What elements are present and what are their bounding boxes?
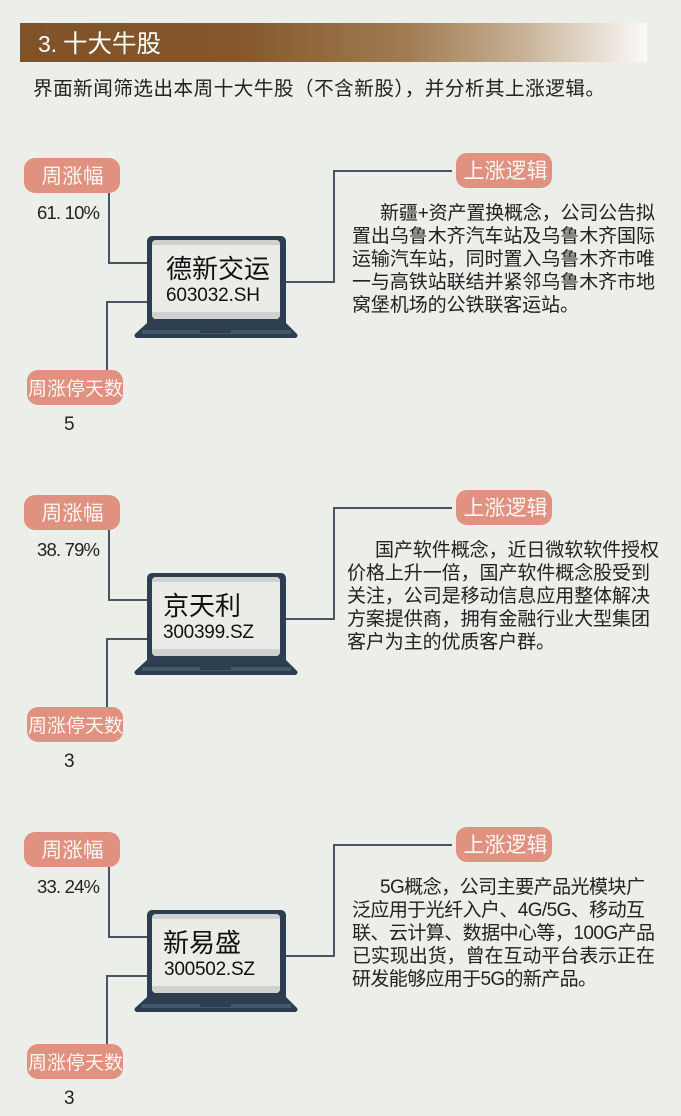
connector lines [107, 508, 452, 707]
badge: limit-up days: 周涨停天数 [28, 715, 123, 737]
rally logic text: 联、云计算、数据中心等，100G产品 [352, 922, 655, 944]
intro text: 界面新闻筛选出本周十大牛股（不含新股），并分析其上涨逻辑。 [33, 78, 605, 100]
title bar [20, 23, 647, 62]
weekly gain value: 38. 79% [37, 539, 100, 560]
limit-up days value: 3 [64, 1088, 75, 1109]
rally logic text: 一与高铁站联结并紧邻乌鲁木齐市地 [352, 271, 655, 293]
icon: laptop [134, 910, 298, 1012]
limit-up days value: 3 [64, 751, 75, 772]
rally logic text: 窝堡机场的公铁联客运站。 [352, 294, 579, 316]
stock code: 300502.SZ [164, 959, 255, 980]
icon: laptop [135, 236, 298, 338]
stock name: 德新交运 [166, 254, 270, 284]
panel: stock 2 京天利 [24, 490, 659, 772]
stock name: 新易盛 [163, 928, 241, 958]
badge: rally logic [456, 153, 552, 188]
stock code: 300399.SZ [163, 622, 254, 643]
weekly gain value: 61. 10% [37, 202, 100, 223]
rally logic text [352, 875, 655, 990]
rally logic text: 国产软件概念，近日微软软件授权 [375, 538, 659, 561]
connector lines [107, 171, 452, 370]
rally logic text: 置出乌鲁木齐汽车站及乌鲁木齐国际 [352, 225, 655, 247]
badge: weekly gain: 周涨幅 [42, 165, 104, 188]
limit-up days value: 5 [64, 414, 75, 435]
stock code: 603032.SH [166, 285, 260, 306]
connector lines [107, 845, 452, 1044]
rally logic text: 5G概念，公司主要产品光模块广 [380, 875, 645, 898]
title bar: 十大牛股 [63, 30, 161, 58]
rally logic text: 泛应用于光纤入户、4G/5G、移动互 [352, 899, 645, 921]
badge: weekly gain: 周涨幅 [42, 839, 104, 862]
rally logic text: 运输汽车站，同时置入乌鲁木齐市唯 [352, 248, 655, 270]
badge: weekly gain: 周涨幅 [42, 502, 104, 525]
rally logic text: 客户为主的优质客户群。 [347, 631, 555, 653]
badge: weekly gain [24, 832, 120, 867]
rally logic text: 价格上升一倍，国产软件概念股受到 [347, 561, 650, 584]
badge: limit-up days: 周涨停天数 [28, 1052, 123, 1074]
weekly gain value: 33. 24% [37, 876, 100, 897]
badge: rally logic: 上涨逻辑 [464, 834, 548, 857]
title bar: 3. [38, 31, 57, 57]
badge: rally logic [456, 827, 552, 862]
badge: weekly gain [24, 495, 120, 530]
badge: limit-up days [27, 707, 123, 742]
rally logic text [352, 201, 655, 316]
badge: limit-up days: 周涨停天数 [28, 378, 123, 400]
rally logic text: 新疆+资产置换概念，公司公告拟 [380, 201, 655, 224]
badge: limit-up days [27, 370, 123, 405]
stock name: 京天利 [163, 591, 241, 621]
badge: limit-up days [27, 1044, 123, 1079]
rally logic text: 关注，公司是移动信息应用整体解决 [347, 585, 650, 607]
rally logic text: 研发能够应用于5G的新产品。 [352, 968, 597, 990]
badge: rally logic [456, 490, 552, 525]
rally logic text [347, 538, 659, 653]
rally logic text: 方案提供商，拥有金融行业大型集团 [347, 608, 650, 630]
panel: stock 1 德新交运 [24, 153, 655, 435]
panel: stock 3 新易盛 [24, 827, 655, 1109]
icon: laptop [134, 573, 298, 675]
badge: rally logic: 上涨逻辑 [464, 497, 548, 520]
badge: rally logic: 上涨逻辑 [464, 160, 548, 183]
badge: weekly gain [24, 158, 120, 193]
rally logic text: 已实现出货，曾在互动平台表示正在 [352, 945, 655, 967]
